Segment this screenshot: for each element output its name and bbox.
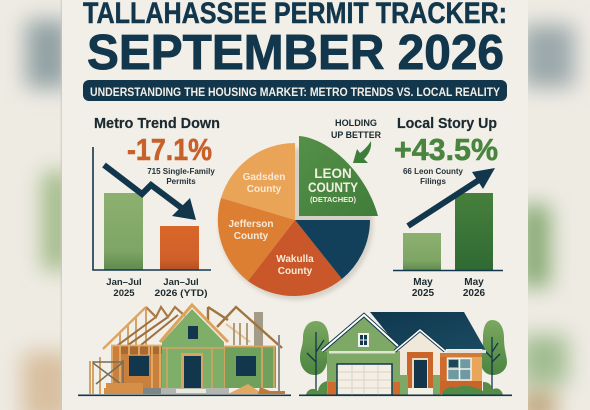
- hedge: [442, 386, 483, 395]
- label: Jefferson: County: [234, 231, 269, 242]
- center green gable: [162, 309, 224, 388]
- ground line: [78, 394, 291, 396]
- slice: navy: [295, 220, 370, 279]
- stat caption: [147, 167, 215, 186]
- stat caption: 715 Single-Family: [147, 167, 215, 176]
- label: Gadsden: County: [247, 184, 282, 195]
- label: Leon: [308, 166, 358, 204]
- arrow head: down trend: [172, 198, 196, 220]
- garage: [337, 364, 392, 395]
- chimney: [254, 312, 263, 346]
- pie chart: [218, 136, 378, 300]
- label: Wakulla: [276, 254, 314, 277]
- title: SEPTEMBER 2026: [87, 26, 504, 80]
- label: Leon: COUNTY: [308, 180, 358, 195]
- slice: Gadsden: [221, 143, 295, 220]
- panel: local story: [393, 115, 503, 299]
- axis labels: metro: 2025: [113, 288, 135, 299]
- stat: -17.1%: -17.1%: [127, 132, 212, 167]
- axis labels: local: May: [464, 277, 484, 288]
- slice: Leon: [299, 136, 378, 216]
- slice: Jefferson: [218, 198, 295, 281]
- callout: holding up better: HOLDING: [335, 118, 377, 128]
- icon: callout arrow: [353, 141, 371, 163]
- label: Wakulla: County: [278, 266, 313, 277]
- label: Leon: LEON: [314, 166, 352, 181]
- axis labels: metro: Jan–Jul: [163, 277, 199, 288]
- shrubs: [306, 381, 329, 395]
- stat: +43.5%: +43.5%: [394, 132, 498, 167]
- axis labels: metro: 2026 (YTD): [154, 288, 208, 299]
- right trusses: [208, 307, 282, 348]
- steps and slab: [104, 383, 143, 394]
- arrow: down trend: [104, 165, 187, 212]
- left trusses: [103, 307, 185, 349]
- green gable: [323, 316, 398, 352]
- roof: [370, 312, 485, 349]
- dormer window: [358, 333, 369, 347]
- entry: [400, 350, 441, 395]
- label: Wakulla: Wakulla: [276, 254, 314, 265]
- label: Jefferson: Jefferson: [228, 219, 274, 230]
- subtitle banner: [83, 80, 507, 101]
- porch columns: [400, 375, 408, 395]
- illustration: finished house: [299, 312, 512, 396]
- axis labels: local: 2026: [463, 288, 486, 299]
- heading: local story: Local Story Up: [397, 115, 497, 132]
- windows: [129, 326, 256, 376]
- axis labels: metro: [106, 277, 208, 299]
- scaffold: [90, 357, 123, 394]
- bar chart: local: [393, 193, 503, 270]
- living room window: [448, 358, 471, 380]
- label: Leon: (DETACHED): [310, 195, 357, 204]
- stat caption: 66 Leon County: [403, 167, 464, 176]
- bar chart: metro: [93, 147, 211, 270]
- panel: metro trend: [93, 115, 220, 299]
- axis labels: local: May: [413, 277, 433, 288]
- ground line: [299, 394, 512, 396]
- callout: holding up better: [331, 118, 381, 163]
- arrow head: up trend: [472, 168, 495, 189]
- right wing: [440, 353, 482, 394]
- right green wing: [223, 346, 276, 388]
- label: Gadsden: Gadsden: [243, 172, 285, 183]
- label: Jefferson: [228, 219, 274, 242]
- main body: [327, 350, 400, 395]
- illustration: house under construction: [78, 305, 291, 396]
- axis labels: local: 2025: [412, 288, 435, 299]
- arrow: up trend: [408, 178, 482, 226]
- callout: holding up better: UP BETTER: [331, 130, 381, 140]
- lumber pile: [228, 384, 263, 394]
- stat caption: Permits: [166, 177, 196, 186]
- front door: [412, 358, 428, 388]
- axis labels: metro: Jan–Jul: [106, 277, 142, 288]
- panel: [60, 0, 528, 410]
- slice: Wakulla: [248, 220, 342, 296]
- stat caption: [403, 167, 464, 186]
- title: [83, 0, 507, 80]
- trees: [300, 320, 507, 395]
- axis labels: local: [412, 277, 486, 299]
- label: Gadsden: [243, 172, 285, 195]
- door: [181, 353, 203, 388]
- subtitle banner: UNDERSTANDING THE HOUSING MARKET: METRO TRENDS VS. LOCAL REALITY: [90, 85, 500, 99]
- heading: metro trend: Metro Trend Down: [94, 115, 220, 132]
- stat caption: Filings: [420, 177, 446, 186]
- left wood frame: [111, 345, 162, 388]
